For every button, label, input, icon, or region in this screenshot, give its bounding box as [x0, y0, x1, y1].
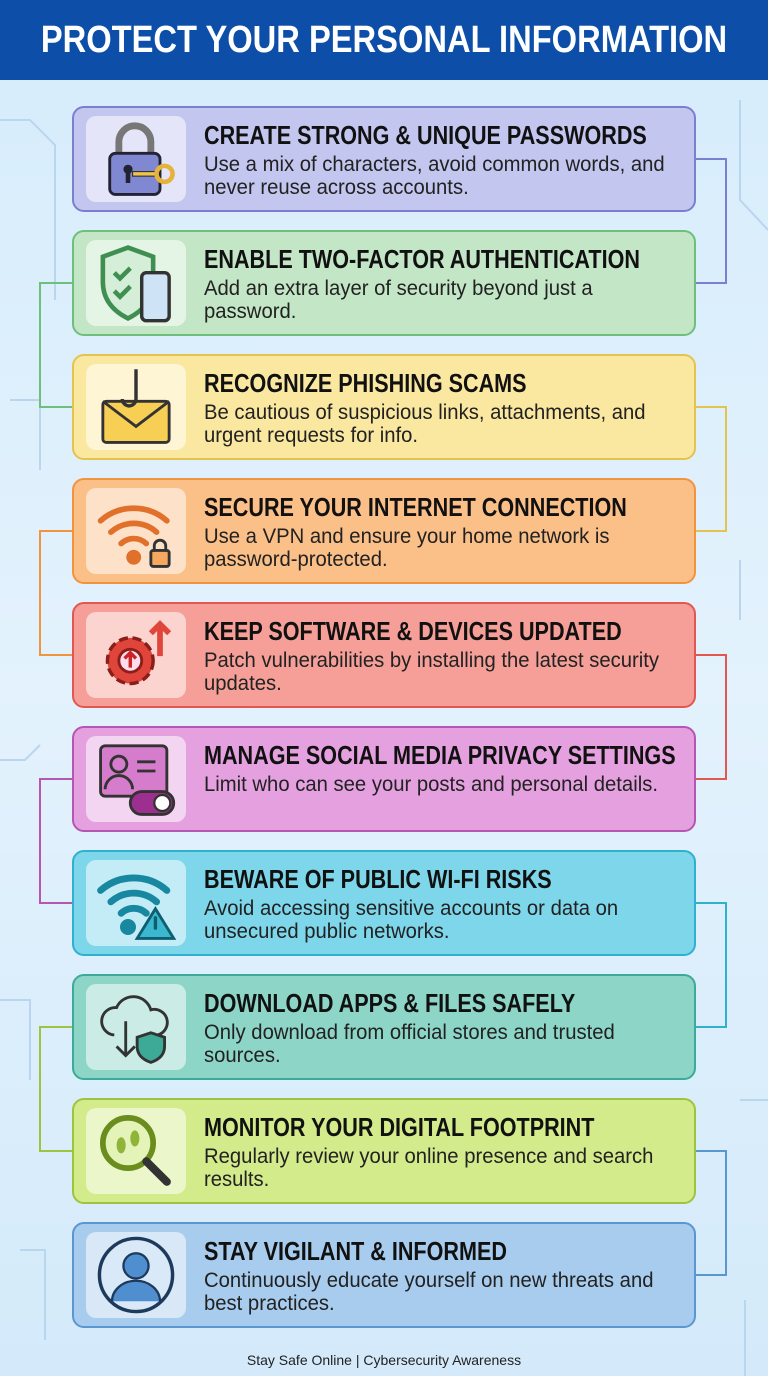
panel: downloads: DOWNLOAD APPS & FILES SAFELY	[204, 988, 575, 1018]
icon: person circle	[86, 1232, 186, 1318]
panel: social media	[72, 726, 696, 832]
panel: updates	[72, 602, 696, 708]
panel: internet connection: SECURE YOUR INTERNET CONNECTION	[204, 492, 627, 522]
panel: 2FA: Add an extra layer of security beyond just a password.	[204, 277, 593, 323]
icon: wifi with warning	[86, 860, 186, 946]
title: PROTECT YOUR PERSONAL INFORMATION	[41, 19, 727, 61]
panel: passwords	[72, 106, 696, 212]
panel: public wifi	[72, 850, 696, 956]
panel: public wifi: BEWARE OF PUBLIC WI-FI RISKS	[204, 864, 552, 894]
panel: 2FA	[72, 230, 696, 336]
panel: social media: MANAGE SOCIAL MEDIA PRIVACY SETTINGS	[204, 740, 676, 770]
panel: public wifi: Avoid accessing sensitive accounts or data on unsecured public networks.	[204, 897, 618, 943]
panel: internet connection	[72, 478, 696, 584]
panel: social media: Limit who can see your posts and personal details.	[204, 773, 658, 796]
panel: passwords: CREATE STRONG & UNIQUE PASSWORDS	[204, 120, 647, 150]
panel: passwords: Use a mix of characters, avoid common words, and never reuse across accounts.	[204, 153, 665, 199]
panel: vigilant	[72, 1222, 696, 1328]
panel: vigilant: STAY VIGILANT & INFORMED	[204, 1236, 507, 1266]
panel: footprint	[72, 1098, 696, 1204]
footer: Stay Safe Online | Cybersecurity Awareness	[247, 1352, 521, 1368]
panel: phishing	[72, 354, 696, 460]
panel: downloads: Only download from official stores and trusted sources.	[204, 1021, 615, 1067]
panel: phishing: RECOGNIZE PHISHING SCAMS	[204, 368, 527, 398]
panel: updates: Patch vulnerabilities by installing the latest security updates.	[204, 649, 659, 695]
icon: envelope with hook	[86, 364, 186, 450]
panel: updates: KEEP SOFTWARE & DEVICES UPDATED	[204, 616, 622, 646]
icon: profile card toggle	[86, 736, 186, 822]
title	[0, 0, 768, 80]
icon: gear with arrows	[86, 612, 186, 698]
panel: internet connection: Use a VPN and ensure your home network is password-protected.	[204, 525, 610, 571]
icon: cloud download shield	[86, 984, 186, 1070]
panel: footprint: MONITOR YOUR DIGITAL FOOTPRINT	[204, 1112, 594, 1142]
icon: lock and key	[86, 116, 186, 202]
icon: shield and phone	[86, 240, 186, 326]
panel: vigilant: Continuously educate yourself on new threats and best practices.	[204, 1269, 653, 1315]
panel: 2FA: ENABLE TWO-FACTOR AUTHENTICATION	[204, 244, 640, 274]
panel: downloads	[72, 974, 696, 1080]
icon: magnifier with footprints	[86, 1108, 186, 1194]
panel: footprint: Regularly review your online presence and search results.	[204, 1145, 653, 1191]
panel: phishing: Be cautious of suspicious links, attachments, and urgent requests for info.	[204, 401, 646, 447]
icon: wifi with padlock	[86, 488, 186, 574]
